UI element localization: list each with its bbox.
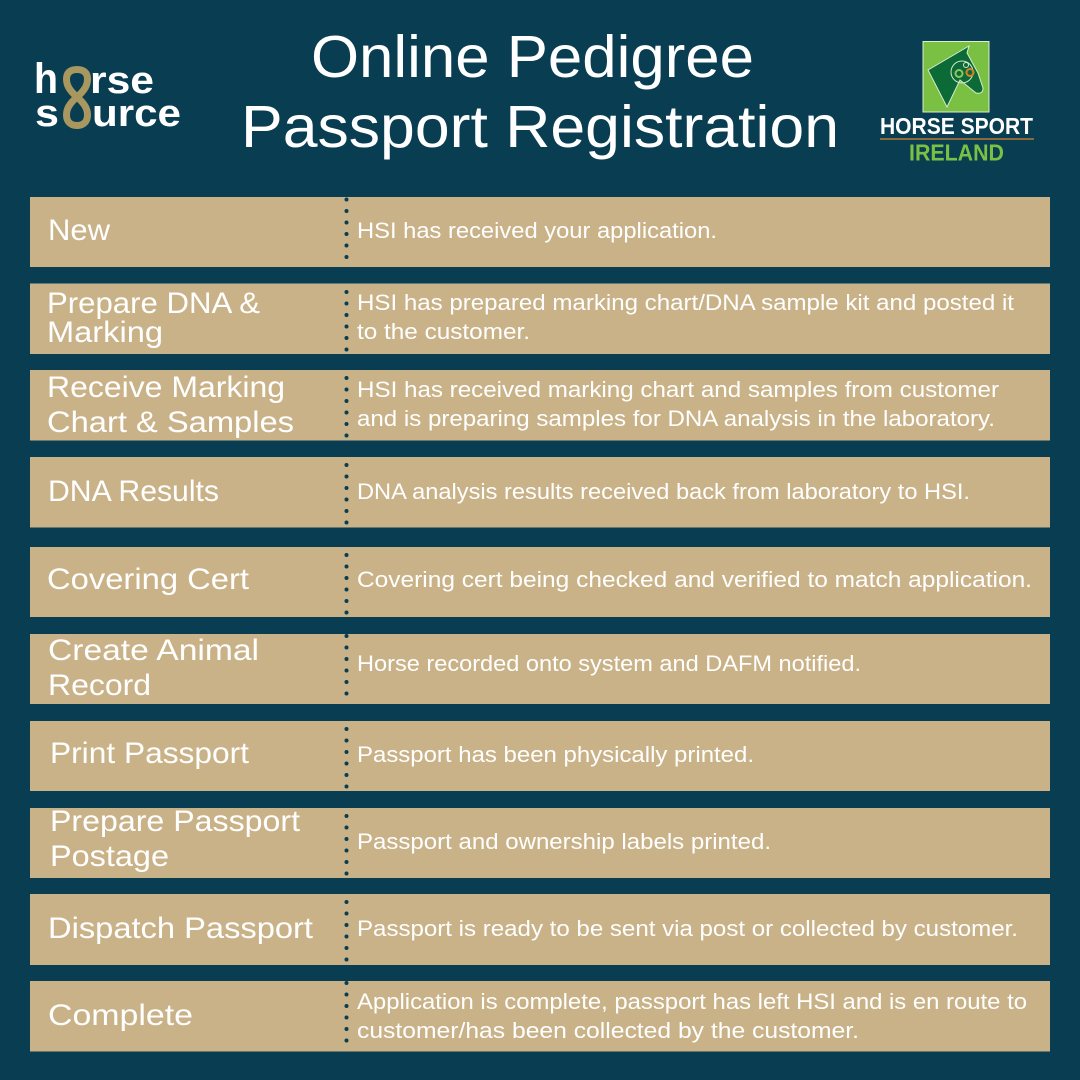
logo: horse source xyxy=(34,55,181,135)
row: Prepare Passport Postage: Passport and ownership labels printed. xyxy=(357,829,771,854)
icon: green square with horse head xyxy=(923,42,989,112)
row: Receive Marking Chart & Samples xyxy=(30,370,1050,440)
row: Dispatch Passport: Passport is ready to be sent via post or collected by customer. xyxy=(357,916,1018,941)
row: Covering Cert: Covering Cert xyxy=(47,563,250,596)
row: Dispatch Passport: Dispatch Passport xyxy=(48,912,314,945)
logo: horse sport ireland xyxy=(880,42,1034,166)
row: Complete xyxy=(30,981,1050,1052)
row: Create Animal Record xyxy=(30,634,1050,704)
row: DNA Results: DNA analysis results received back from laboratory to HSI. xyxy=(357,479,970,504)
row: Dispatch Passport xyxy=(30,894,1050,965)
row: Receive Marking Chart & Samples: Chart & Samples xyxy=(47,406,294,439)
row: Receive Marking Chart & Samples: HSI has received marking chart and samples from customer xyxy=(357,377,999,402)
logo: horse sport ireland: IRELAND xyxy=(909,140,1004,166)
title xyxy=(241,24,839,160)
logo: horse source: h xyxy=(34,55,58,103)
row: Complete: Complete xyxy=(48,999,193,1032)
row: Receive Marking Chart & Samples: Receive Marking xyxy=(47,371,285,404)
row: Print Passport xyxy=(30,721,1050,791)
row: Prepare DNA & Marking: Prepare DNA & xyxy=(47,287,260,320)
row: Complete: customer/has been collected by the customer. xyxy=(357,1018,859,1043)
logo: horse sport ireland: HORSE SPORT xyxy=(880,113,1033,139)
row: Covering Cert xyxy=(30,547,1050,617)
row: Create Animal Record: Horse recorded onto system and DAFM notified. xyxy=(357,651,861,676)
row: Print Passport: Passport has been physically printed. xyxy=(357,742,754,767)
logo: horse source: s xyxy=(35,93,59,135)
row: Prepare Passport Postage xyxy=(30,805,1050,878)
row: Prepare DNA & Marking: to the customer. xyxy=(357,319,530,344)
row: Print Passport: Print Passport xyxy=(50,737,250,770)
row: Complete: Application is complete, passport has left HSI and is en route to xyxy=(357,989,1027,1014)
row: New xyxy=(30,197,1050,267)
row: Create Animal Record: Create Animal xyxy=(48,634,259,667)
title: Online Pedigree xyxy=(311,24,754,90)
row: Prepare DNA & Marking: Marking xyxy=(47,316,163,349)
row: DNA Results xyxy=(30,457,1050,528)
row: Prepare Passport Postage: Postage xyxy=(50,840,169,873)
row: Prepare DNA & Marking: HSI has prepared marking chart/DNA sample kit and posted it xyxy=(357,290,1014,315)
row: New: New xyxy=(48,214,110,247)
row: Covering Cert: Covering cert being checked and verified to match application. xyxy=(357,567,1032,592)
row: New: HSI has received your application. xyxy=(357,218,717,243)
title: Passport Registration xyxy=(241,94,839,160)
row: DNA Results: DNA Results xyxy=(48,475,219,508)
row: Prepare DNA & Marking xyxy=(30,284,1050,354)
row: Prepare Passport Postage: Prepare Passport xyxy=(50,805,301,838)
row: Receive Marking Chart & Samples: and is preparing samples for DNA analysis in the laboratory. xyxy=(357,406,995,431)
row: Create Animal Record: Record xyxy=(48,669,151,702)
logo: horse source: rse xyxy=(90,60,154,102)
logo: horse source: urce xyxy=(92,93,181,135)
